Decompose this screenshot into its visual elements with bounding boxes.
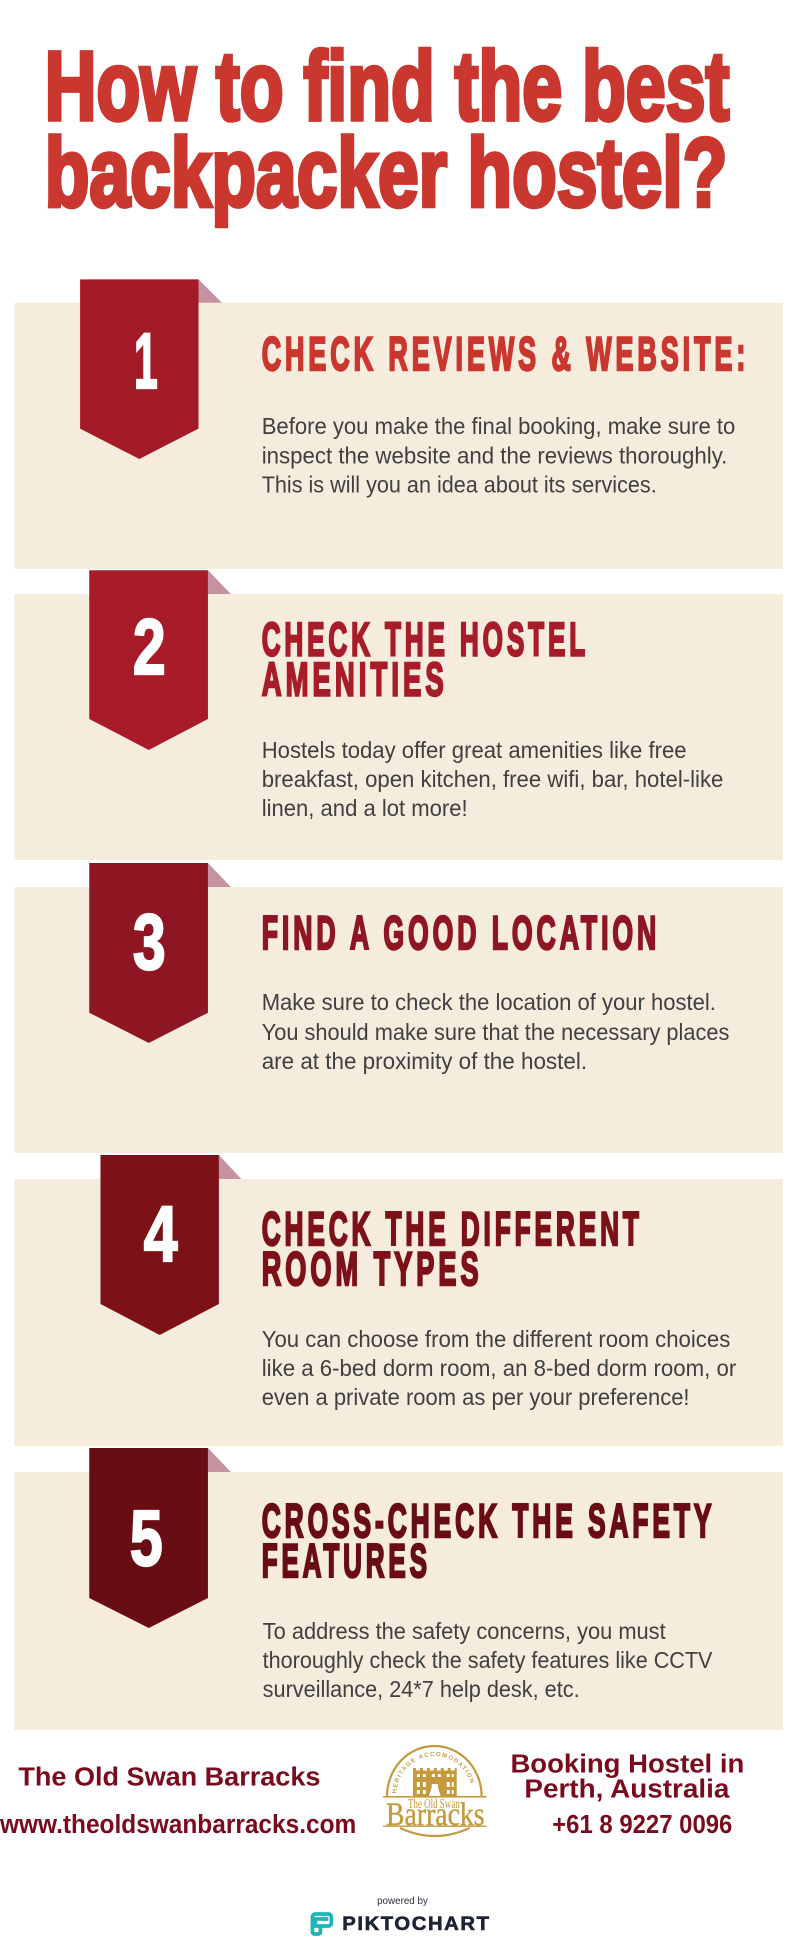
logo: The Old Swan Barracks: The Old Swan: [408, 1797, 460, 1812]
heading: step 2: [262, 614, 589, 707]
text: step 1: This is will you an idea about its services.: [262, 471, 657, 498]
heading: step 4: ROOM TYPES: [262, 1243, 483, 1296]
panel: step 5: [14, 1448, 783, 1730]
heading: step 5: [262, 1495, 715, 1588]
text: step 5: To address the safety concerns, you must: [263, 1618, 666, 1644]
heading: step 2: AMENITIES: [262, 654, 448, 707]
wordmark: piktochart: PIKTOCHART: [342, 1914, 491, 1935]
text: step 1: Before you make the final booking, make sure to: [262, 413, 735, 439]
footer: website: www.theoldswanbarracks.com: [0, 1811, 356, 1839]
panel: step 1: [14, 279, 783, 569]
text: step 1: inspect the website and the reviews thoroughly.: [262, 442, 727, 469]
footer: hostel name: The Old Swan Barracks: [18, 1764, 320, 1792]
ribbon: step 2: 2: [133, 603, 166, 691]
footer: phone: +61 8 9227 0096: [552, 1811, 732, 1839]
powered by label: powered by: [377, 1896, 429, 1907]
logo: The Old Swan Barracks: HERITAGE ACCOMODATION: [392, 1752, 474, 1794]
logo: The Old Swan Barracks: Barracks: [386, 1797, 485, 1833]
text: step 2: Hostels today offer great amenities like free: [262, 737, 687, 763]
ribbon: step 1: [80, 279, 222, 459]
text: step 2: [262, 737, 723, 821]
text: step 4: like a 6-bed dorm room, an 8-bed dorm room, or: [262, 1355, 737, 1381]
text: step 4: You can choose from the different room choices: [262, 1326, 730, 1352]
ribbon: step 4: 4: [144, 1190, 178, 1278]
text: step 5: surveillance, 24*7 help desk, etc.: [263, 1676, 580, 1702]
footer: booking heading: Perth, Australia: [524, 1776, 730, 1804]
text: step 4: even a private room as per your preference!: [262, 1384, 690, 1410]
ribbon: step 1: 1: [134, 317, 158, 405]
heading: step 4: [262, 1203, 643, 1296]
footer: booking heading: Booking Hostel in: [510, 1751, 744, 1779]
text: step 3: Make sure to check the location of your hostel.: [262, 989, 716, 1015]
title: [45, 31, 729, 227]
ribbon: step 2: [89, 570, 231, 750]
heading: step 5: FEATURES: [262, 1535, 431, 1588]
icon: piktochart logo: [312, 1914, 331, 1934]
ribbon: step 3: 3: [133, 898, 166, 986]
text: step 1: [262, 413, 735, 498]
panel: step 4: [14, 1155, 783, 1446]
panel: step 2: [14, 570, 783, 860]
text: step 4: [262, 1326, 737, 1410]
footer: booking heading: [510, 1751, 744, 1804]
text: step 2: linen, and a lot more!: [262, 795, 468, 821]
ribbon: step 5: [89, 1448, 231, 1628]
text: step 3: You should make sure that the necessary places: [262, 1019, 729, 1045]
text: step 5: [263, 1618, 713, 1702]
ribbon: step 5: 5: [130, 1494, 163, 1582]
text: step 5: thoroughly check the safety features like CCTV: [263, 1647, 713, 1673]
panel: step 3: [14, 863, 783, 1153]
icon: building: [413, 1768, 457, 1796]
logo: The Old Swan Barracks: [383, 1744, 487, 1838]
text: step 3: [262, 989, 729, 1074]
text: step 3: are at the proximity of the hostel.: [262, 1048, 587, 1074]
ribbon: step 3: [89, 863, 231, 1043]
text: step 2: breakfast, open kitchen, free wifi, bar, hotel-like: [262, 766, 723, 792]
ribbon: step 4: [100, 1155, 241, 1335]
